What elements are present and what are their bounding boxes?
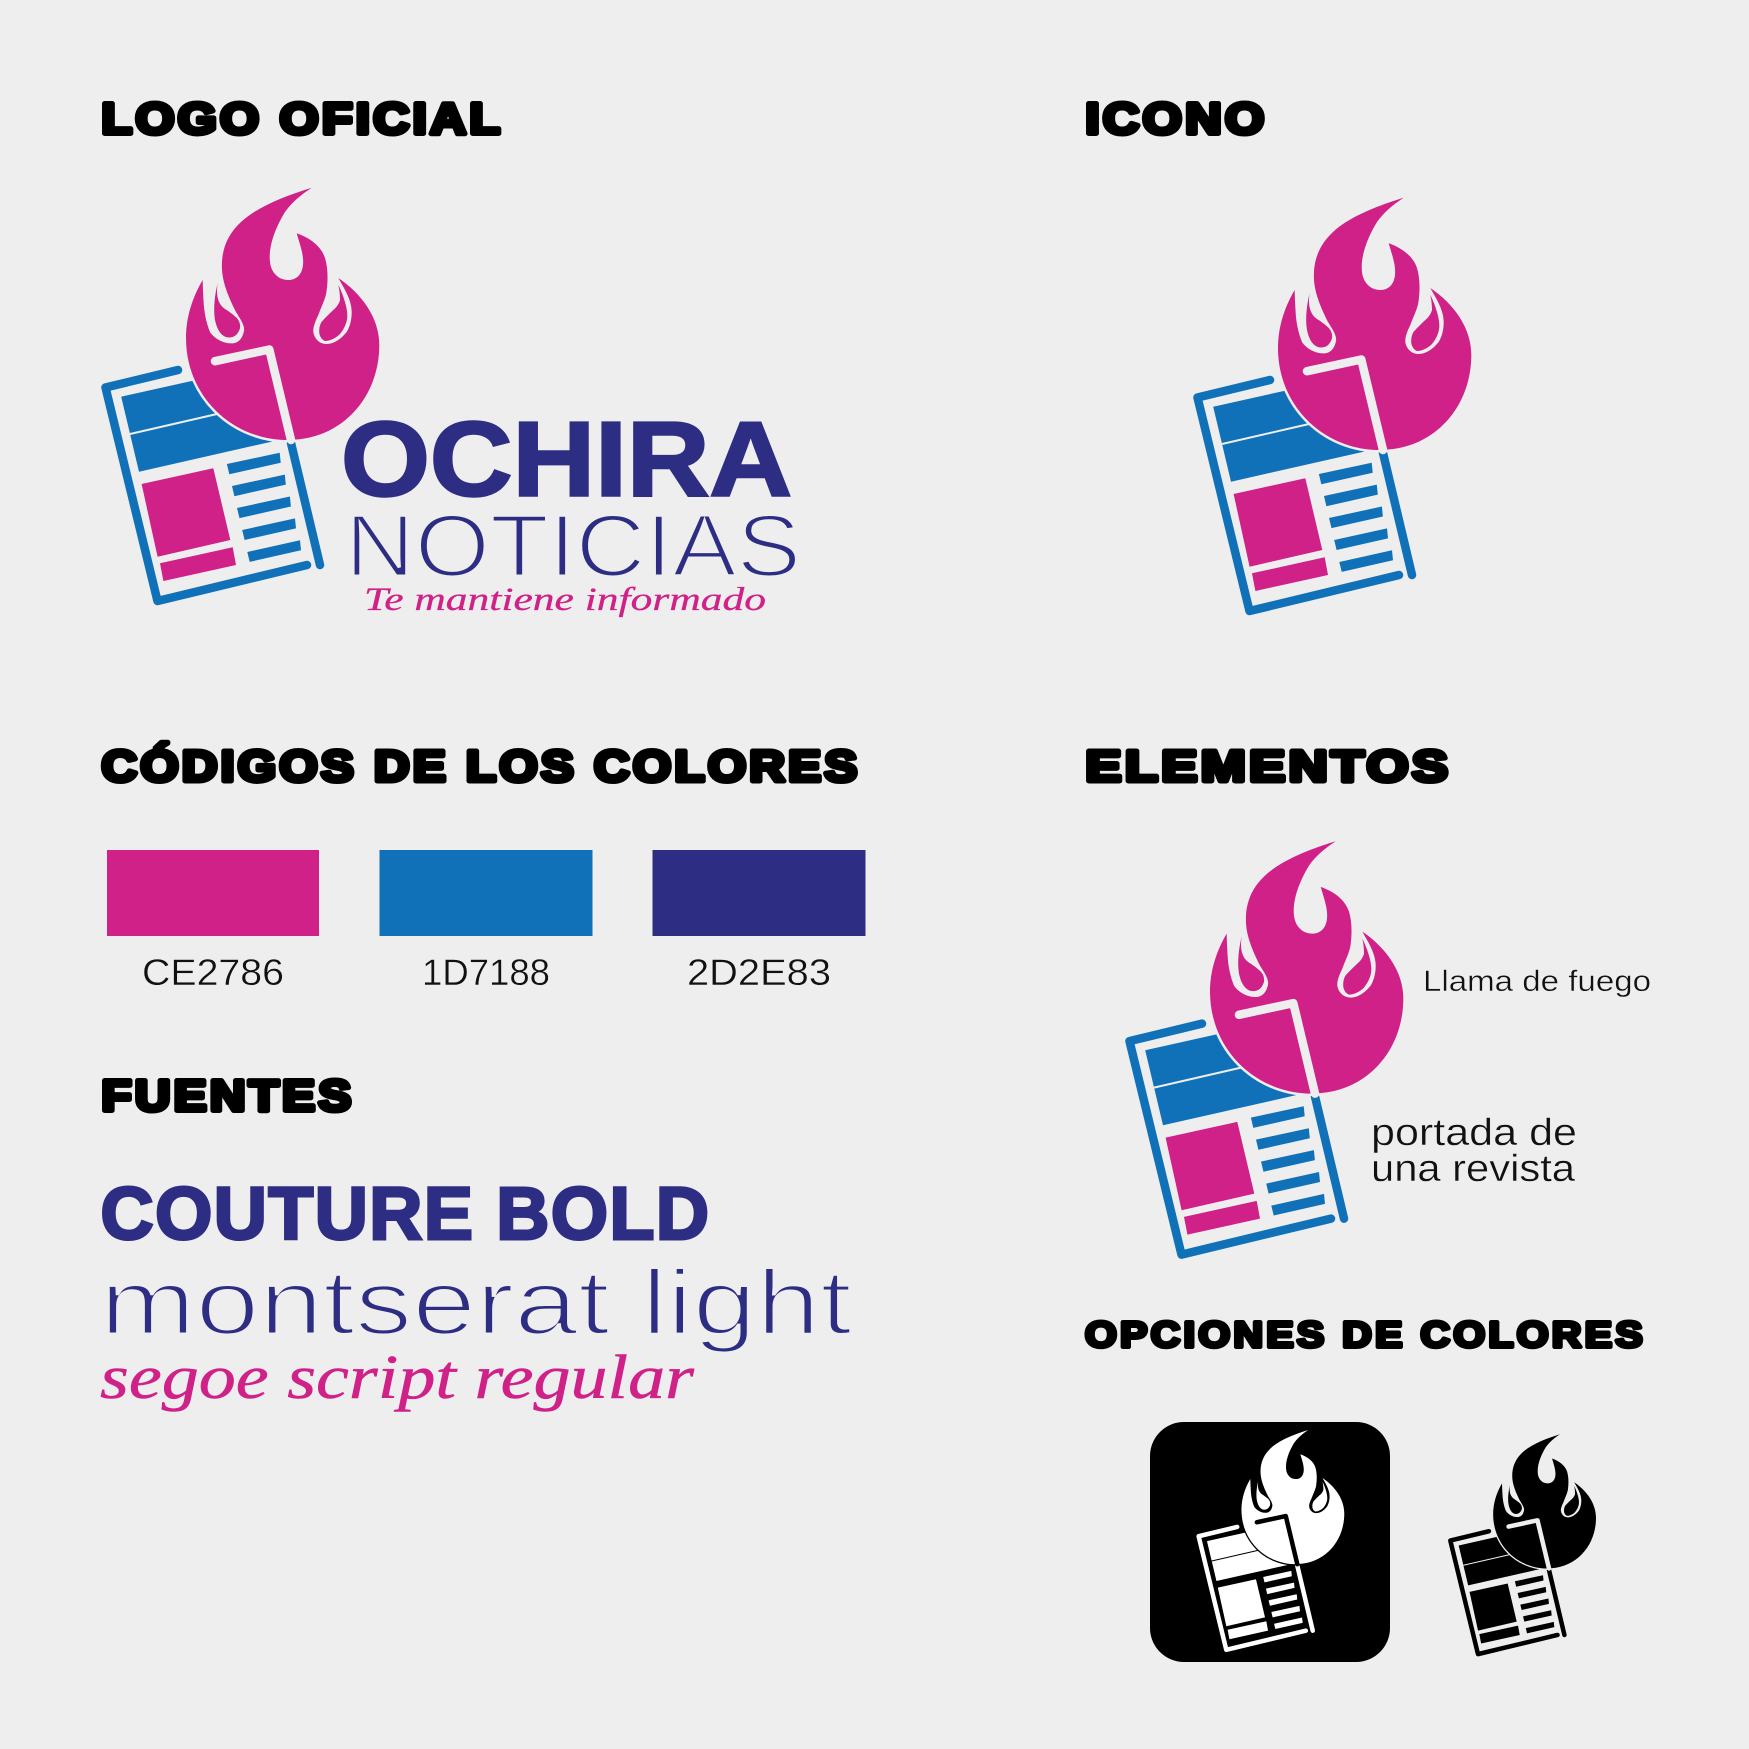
tagline: Te mantiene informado: [364, 582, 766, 618]
colour swatch: navy: [652, 850, 866, 993]
label: portada de una revista: [1371, 1112, 1577, 1190]
heading: icono: ICONO: [1086, 94, 1268, 144]
official logo: [106, 188, 801, 618]
heading: logo oficial: LOGO OFICIAL: [102, 94, 504, 144]
label: portada de una revista: portada de: [1371, 1112, 1577, 1154]
colour swatch: navy: 2D2E83: [687, 952, 831, 993]
colour option: white on black tile: [1150, 1422, 1390, 1662]
wordmark: ochira: OCHIRA: [341, 400, 792, 518]
font sample: segoe script: segoe script regular: [100, 1344, 695, 1412]
heading: opciones de colores: OPCIONES DE COLORES: [1085, 1314, 1646, 1355]
colour swatch: blue: [380, 850, 592, 993]
elements diagram: [1130, 841, 1651, 1255]
heading: fuentes: FUENTES: [102, 1072, 354, 1120]
label: llama de fuego: Llama de fuego: [1423, 965, 1651, 998]
font sample: couture bold: COUTURE BOLD: [100, 1172, 710, 1255]
colour swatch: pink: CE2786: [142, 952, 284, 993]
icon panel: [1198, 198, 1471, 611]
heading: elementos: ELEMENTOS: [1086, 742, 1452, 791]
icon: flame and newspaper: [1130, 841, 1403, 1255]
colour swatch: blue: 1D7188: [422, 952, 550, 993]
colour option: black on light: [1450, 1434, 1596, 1654]
icon: flame over newspaper: [106, 188, 379, 601]
colour swatch: pink: [107, 850, 319, 993]
label: portada de una revista: una revista: [1371, 1148, 1576, 1190]
font sample: montserrat light: montserat light: [100, 1252, 852, 1354]
wordmark: noticias: NOTICIAS: [345, 496, 801, 595]
heading: codigos de los colores: CÓDIGOS DE LOS COLORES: [102, 741, 860, 791]
